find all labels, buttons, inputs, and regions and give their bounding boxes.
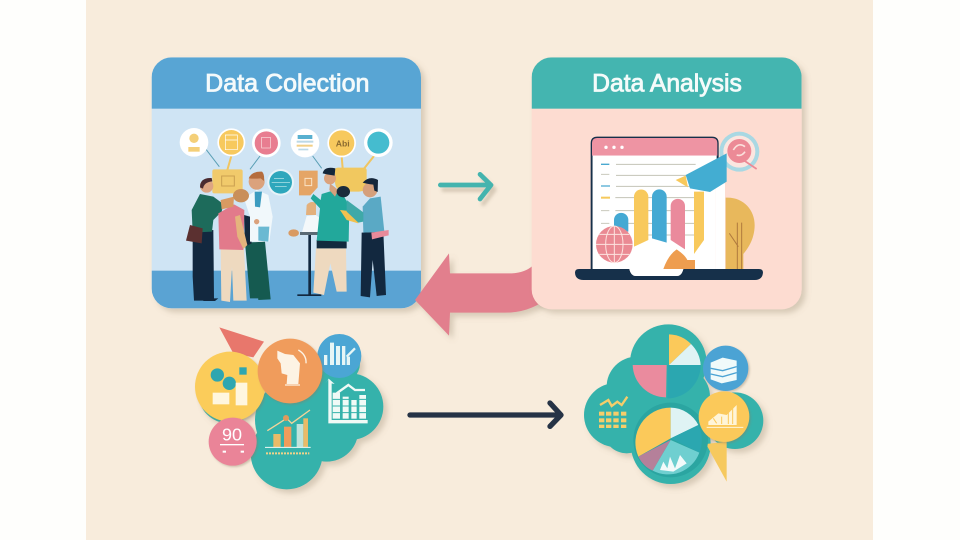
person: pink shirt [218,189,249,302]
circle: blue stack [703,346,748,391]
arrow: dark right [410,403,561,426]
person: blue shirt [347,178,389,297]
teal cloud [198,343,383,489]
heading: data collection: Data Colection [205,69,369,97]
icon: blue flag [676,153,727,192]
podium with laptop [288,202,329,296]
icons: speech bubbles: Abi [336,138,350,148]
circle: pink number: 90 [222,424,242,444]
circle: blue chart [317,334,361,378]
circle: yellow growth [699,391,749,442]
icons: speech bubbles [180,128,393,196]
person: green jacket [186,178,223,301]
person: white coat [244,172,273,300]
icon: calendar with line [599,397,627,428]
pie chart: bottom [633,403,708,477]
cluster: data collection charts [195,327,383,489]
icon: tree [726,198,755,269]
chart: white bars [325,379,368,423]
circle: pink number [209,418,257,466]
icon: red kite [219,327,264,357]
icon: pink globe [596,226,633,263]
chart: small bars and line [265,410,311,453]
circle: orange figure [258,339,322,403]
teal cloud [584,324,763,484]
arrow: teal right [440,174,494,204]
bar chart [614,189,704,254]
icon: target with magnifier [719,132,759,172]
heading: data analysis: Data Analysis [592,69,742,97]
circle: yellow [195,352,265,422]
person: teal sweater [311,168,358,295]
cluster: data analysis charts [584,324,763,484]
panel: data analysis [532,57,802,309]
laptop with chart [575,138,763,280]
icon: yellow tail [706,442,727,482]
pie chart: top [633,334,701,398]
panel: data collection [152,57,421,308]
arrow: pink left [415,253,545,336]
